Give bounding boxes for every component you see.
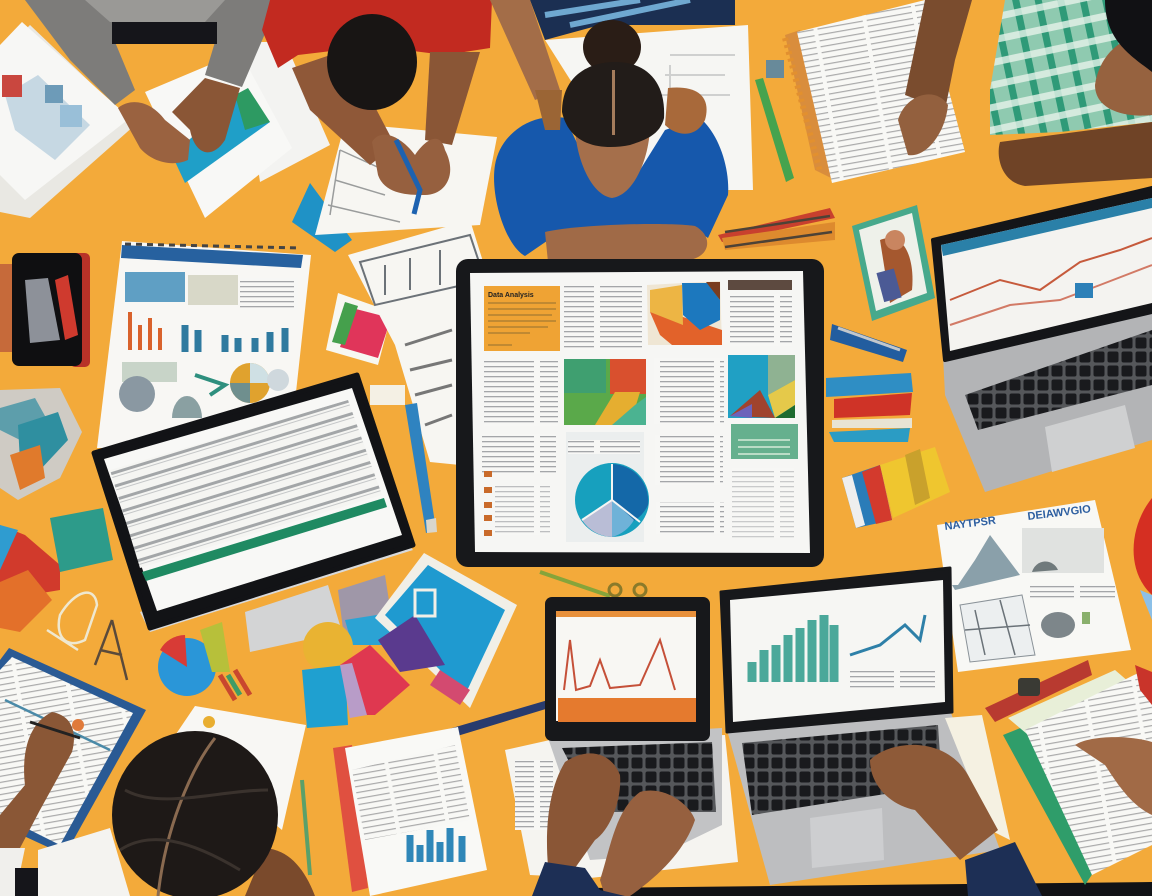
folder and coloured geometric cutouts: [302, 553, 517, 728]
framed photo card: [852, 205, 935, 321]
desktop monitor with text: [94, 375, 413, 652]
left hand typing centre: [547, 753, 620, 868]
green pen with scissors: [540, 572, 646, 596]
paper stack top left: [0, 22, 135, 218]
paper with charts right: DEIAWVGIO: [1027, 503, 1092, 523]
tablet green and red chart: [564, 359, 646, 425]
person top left: grey sweater and hands: [25, 0, 272, 163]
paper with charts right: [937, 500, 1131, 672]
green folders and notes bottom right: [985, 660, 1152, 885]
white papers and teal note under hands: [145, 42, 330, 218]
ruler pencil by head: [302, 780, 310, 875]
long pen diagonal: [360, 700, 549, 765]
white sheet near head: [172, 706, 306, 830]
girl in blue shirt seen from above: [494, 20, 728, 262]
tablet bottom: line chart: [505, 597, 738, 878]
right hand typing centre: [600, 791, 695, 896]
laptop right: screen with line chart: [933, 188, 1152, 492]
central tablet with dashboard: [456, 259, 824, 567]
pen blue: [405, 403, 437, 533]
tablet text column top: [564, 285, 642, 350]
phone and red case left: [0, 253, 90, 367]
hand bottom right: [1075, 737, 1152, 815]
report binder with charts: [97, 241, 311, 448]
sleeves bottom centre: [532, 862, 625, 896]
worksheet bottom centre: [333, 727, 487, 896]
folded colour folders: [842, 447, 950, 528]
laptop bottom: bar chart: [721, 568, 1010, 885]
pencil and open notebook top right: [755, 0, 965, 183]
tablet green callout: [731, 424, 798, 459]
red circle at right edge: [1134, 498, 1152, 620]
pie shaped paper model: [158, 622, 250, 700]
dark table edge at bottom: [590, 882, 1152, 896]
coloured pencils bundle: [718, 208, 835, 250]
paper with charts right: NAYTPSR: [944, 515, 997, 533]
stacked blueprint sheets centre: [348, 220, 495, 465]
white sketch sheet behind girl: [545, 25, 753, 190]
tablet blue pie chart: [566, 432, 649, 542]
person top right: green plaid shirt and arm: [898, 0, 1152, 186]
tablet orange text card: Data Analysis: [488, 292, 534, 299]
clipboard bottom left: [0, 648, 146, 855]
drawing compass and glasses: [47, 593, 127, 680]
person top centre: striped shirt sleeve: [490, 0, 735, 100]
hand typing right and blue sleeve: [870, 745, 1042, 896]
tablet orange and blue pie: [647, 281, 722, 345]
person top centre left: red shirt, dark hair, arms: [262, 0, 492, 214]
person bottom left: braided hair head: [0, 731, 315, 896]
blueprint sheet and blue tab: [292, 123, 497, 252]
tablet text and icon column: [482, 434, 556, 535]
crumpled paper bag left: [0, 388, 82, 500]
colour paper cards lower left: [0, 508, 113, 632]
colour swatch card: [326, 293, 392, 365]
tablet blue colour chart: [728, 355, 795, 418]
tablet text column middle: [654, 358, 724, 424]
tablet text and icons right: [655, 435, 794, 538]
hand with pen bottom left: [0, 712, 80, 848]
tablet orange text card: [484, 286, 560, 351]
markers and books right of tablet: [826, 324, 913, 442]
tablet text column left: [484, 360, 558, 426]
tablet brown header note: [728, 280, 792, 346]
